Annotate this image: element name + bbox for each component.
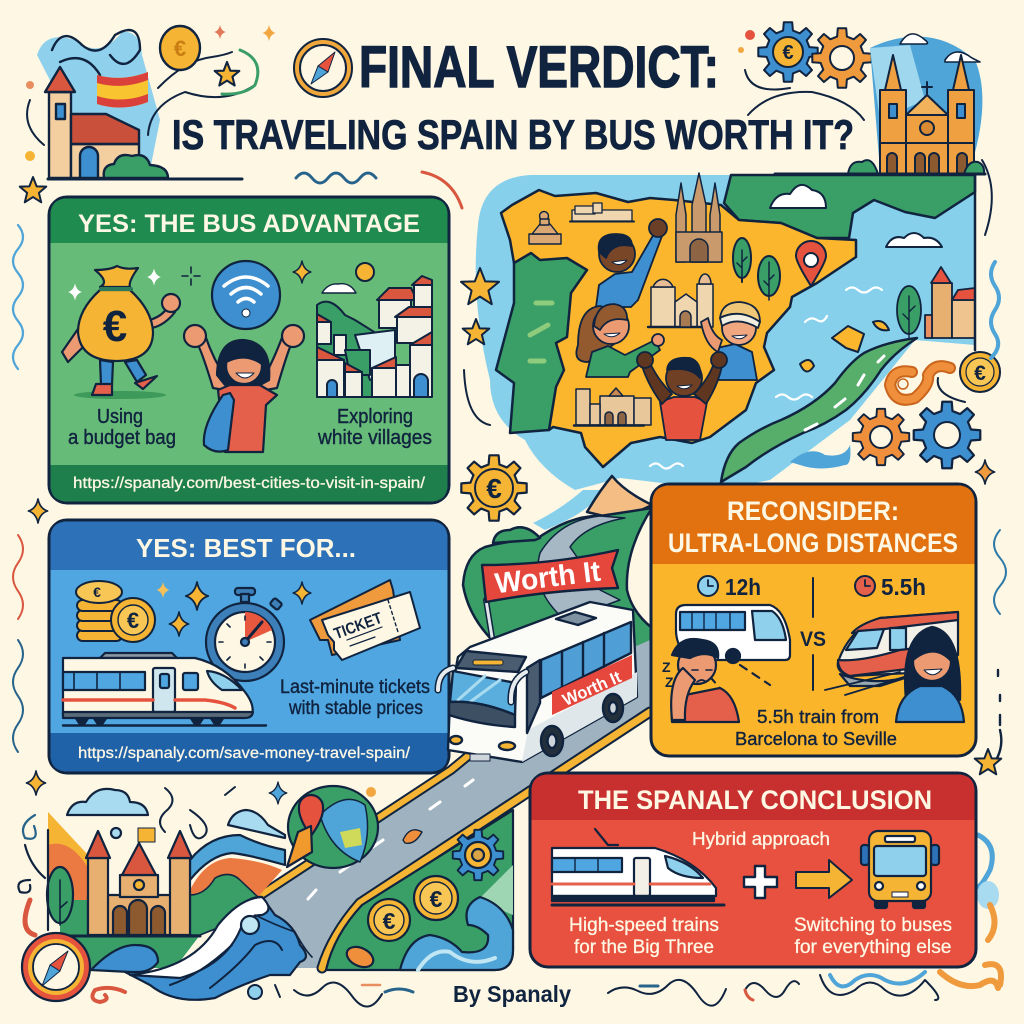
road edges (258, 705, 530, 897)
bottom squiggles (248, 972, 998, 1007)
panel heading: YES: BEST FOR... (136, 533, 356, 563)
panel body (651, 484, 976, 756)
sky swirl (37, 32, 160, 170)
byline: By Spanaly (453, 981, 571, 1007)
link: https://spanaly.com/best-cities-to-visit-in-spain/ (73, 475, 426, 492)
caption: switching to buses (794, 915, 952, 958)
leaf on road (403, 830, 422, 843)
panel heading: ULTRA-LONG DISTANCES (668, 528, 958, 558)
link: https://spanaly.com/save-money-travel-spain/ (78, 745, 411, 762)
swirl lines (745, 70, 864, 120)
caption: exploring white villages: Exploring (337, 406, 413, 428)
leaf (344, 943, 376, 971)
panel header (532, 774, 974, 820)
icon: stopwatch (206, 588, 284, 681)
clouds on map (770, 185, 942, 247)
Portugal land (496, 253, 587, 433)
tree (47, 867, 73, 923)
caption: high-speed trains (569, 915, 719, 958)
flag pole (486, 600, 492, 637)
trees on map (733, 238, 780, 300)
right of conclusion panel (978, 835, 992, 887)
icon: compass (294, 39, 352, 97)
church hall (71, 144, 139, 178)
castle (88, 895, 190, 935)
winding road (538, 516, 625, 620)
panel header (50, 522, 448, 570)
star (215, 62, 239, 86)
caption: train comparison: Barcelona to Seville (735, 729, 897, 749)
icon: money bag: € (103, 302, 127, 351)
Balearic islands (800, 321, 889, 372)
doodles (160, 787, 235, 838)
stars beside map (461, 268, 499, 304)
right swirl (890, 366, 965, 402)
field coin 1 (414, 876, 458, 920)
title (172, 35, 854, 158)
green hill (190, 874, 258, 935)
mirrors (438, 668, 453, 690)
icon: wifi (212, 261, 280, 329)
person: waving man in blue (596, 219, 667, 307)
tower (49, 92, 71, 178)
panel: the spanaly conclusion (530, 773, 976, 967)
train illustration (825, 612, 958, 695)
dark pillar (527, 660, 540, 733)
right edge of map (974, 175, 976, 350)
panel: reconsider ultra-long distances (651, 484, 976, 756)
woman cheering (184, 325, 304, 452)
title line 2: IS TRAVELING SPAIN BY BUS WORTH IT? (172, 111, 854, 158)
panel body (530, 773, 976, 967)
swirls (148, 50, 258, 135)
caption: train comparison: 5.5h train from (757, 707, 879, 727)
plus sign (744, 866, 777, 898)
roof hatch (556, 612, 596, 625)
decorative swirls and stars around map: € (486, 473, 502, 504)
right coin (960, 352, 1000, 392)
panel header (652, 486, 974, 564)
panel heading: THE SPANALY CONCLUSION (578, 785, 932, 815)
bottom landscape: € (383, 908, 396, 934)
star left top (20, 177, 46, 202)
panel: yes best for (49, 520, 449, 773)
happy woman (896, 627, 964, 722)
orange gear (812, 28, 872, 88)
clock and 12h: 12h (725, 574, 761, 600)
road centre dashes (308, 780, 473, 899)
blue gear (914, 402, 980, 468)
main wave (125, 897, 306, 1000)
sky (870, 36, 982, 170)
bottom doodles (25, 900, 35, 935)
landmark: Santiago monument (529, 212, 561, 244)
train (552, 829, 724, 905)
byline (248, 972, 998, 1007)
flag pole inner (486, 600, 492, 637)
flag text: Worth It (493, 556, 603, 600)
right coast village (897, 267, 975, 338)
coin (160, 26, 200, 70)
title line 1: FINAL VERDICT: (359, 35, 719, 100)
panel body (49, 197, 449, 503)
top-left village with flag: € (174, 36, 186, 61)
icon: ticket (310, 580, 420, 660)
side windows (541, 622, 631, 698)
landscape right stripes (190, 835, 285, 880)
headlights (499, 742, 515, 750)
top squiggle (296, 173, 376, 183)
url strip (50, 733, 448, 772)
caption: high-speed trains: High-speed trains (569, 915, 719, 936)
caption: last-minute tickets (280, 677, 430, 719)
top-right gears and cathedral (738, 22, 992, 235)
arrow (796, 860, 852, 898)
ground (60, 935, 200, 968)
Portugal marks (530, 303, 552, 361)
right side squiggles (991, 262, 999, 358)
panel heading (668, 496, 958, 558)
euro gear (758, 22, 818, 82)
caption: using a budget bag (68, 406, 176, 449)
top-left village with flag (25, 25, 275, 179)
caption: switching to buses: Switching to buses (794, 915, 952, 936)
bottom landscape: € (430, 886, 443, 912)
caption: exploring white villages (317, 406, 432, 449)
caption: last-minute tickets: with stable prices (288, 698, 423, 719)
person: man with hat (701, 302, 760, 380)
front top (456, 651, 526, 672)
coastal green strip (721, 338, 917, 482)
top-right gears and cathedral: € (782, 42, 794, 64)
decorative swirls and stars around map (13, 172, 1006, 985)
versus divider (800, 578, 826, 690)
Spain land (501, 190, 856, 467)
panel: yes the bus advantage (49, 197, 449, 503)
stream (533, 490, 600, 530)
panel body (49, 520, 449, 773)
icon: ticket: TICKET (332, 610, 385, 643)
wheels (541, 726, 563, 756)
caption: last-minute tickets: Last-minute tickets (280, 677, 430, 698)
map pin (796, 241, 826, 286)
caption: switching to buses: for everything else (794, 937, 952, 958)
left side squiggles (13, 225, 23, 369)
main road (258, 640, 650, 968)
landmark: castle (574, 388, 651, 426)
front lower (449, 702, 515, 727)
clock and 5.5h: 5.5h (881, 574, 926, 600)
field right of road (326, 810, 513, 970)
icon: money bag (62, 266, 200, 399)
clock and 5.5h (855, 574, 926, 600)
band text: Worth It (560, 667, 624, 710)
bottom landscape (18, 782, 513, 1002)
panel heading: RECONSIDER: (727, 496, 899, 526)
cathedral (880, 90, 906, 174)
small gear on field (453, 830, 503, 880)
bus roof and side (448, 602, 637, 762)
Spanish flag (97, 72, 148, 108)
person: woman in green (576, 304, 664, 377)
red side band (552, 655, 632, 715)
green hill (463, 508, 652, 700)
decorative swirls and stars around map: € (974, 362, 986, 385)
bus icon (861, 831, 939, 908)
landmark: long palace (570, 203, 634, 222)
small wave (91, 945, 158, 972)
field coin 2 (368, 899, 410, 941)
sparks (214, 25, 226, 39)
mountain (587, 476, 652, 520)
sparkle (975, 460, 995, 484)
caption: exploring white villages: white villages (317, 427, 432, 449)
bottom-left compass (22, 933, 90, 1001)
white foam (130, 897, 268, 978)
field waves (400, 897, 513, 970)
road with hills and mountain (258, 476, 652, 968)
person: man in red with raised arms (637, 352, 727, 440)
caption: using a budget bag: a budget bag (68, 427, 176, 449)
panel heading: YES: THE BUS ADVANTAGE (78, 210, 420, 238)
icon: coin stack (76, 581, 311, 642)
clock and 12h (698, 574, 761, 600)
orange gear (853, 409, 909, 465)
bus illustration (676, 605, 790, 700)
panel header (50, 198, 448, 243)
versus divider: VS (800, 628, 826, 651)
euro gear left of road (461, 455, 527, 521)
windshield (450, 671, 516, 715)
map sea (476, 175, 975, 490)
icon: coin stack: € (127, 608, 139, 633)
waves (790, 445, 850, 468)
bush (104, 155, 168, 178)
landscape left hills (48, 812, 88, 880)
flag banner (482, 550, 618, 602)
clouds (67, 789, 148, 815)
caption: high-speed trains: for the Big Three (574, 937, 714, 958)
white villages (293, 261, 432, 397)
url strip (50, 465, 448, 502)
sea ripples (650, 288, 882, 468)
bush (493, 527, 540, 543)
hybrid label: Hybrid approach (692, 829, 830, 849)
castle flag (138, 828, 155, 842)
bus with worth it flag (438, 550, 637, 762)
globe (288, 786, 378, 868)
tired man: Z (665, 674, 674, 690)
caption: train comparison (735, 707, 897, 749)
map of Spain (476, 173, 975, 490)
landmark: domed church (648, 274, 713, 327)
icon: coin stack: € (93, 584, 101, 600)
caption: using a budget bag: Using (97, 406, 143, 428)
globe pin (299, 795, 323, 836)
tired man (662, 639, 739, 722)
landmark: gothic cathedral (676, 173, 722, 262)
France land (724, 175, 975, 238)
tired man: Z (662, 659, 671, 675)
train (63, 653, 266, 726)
